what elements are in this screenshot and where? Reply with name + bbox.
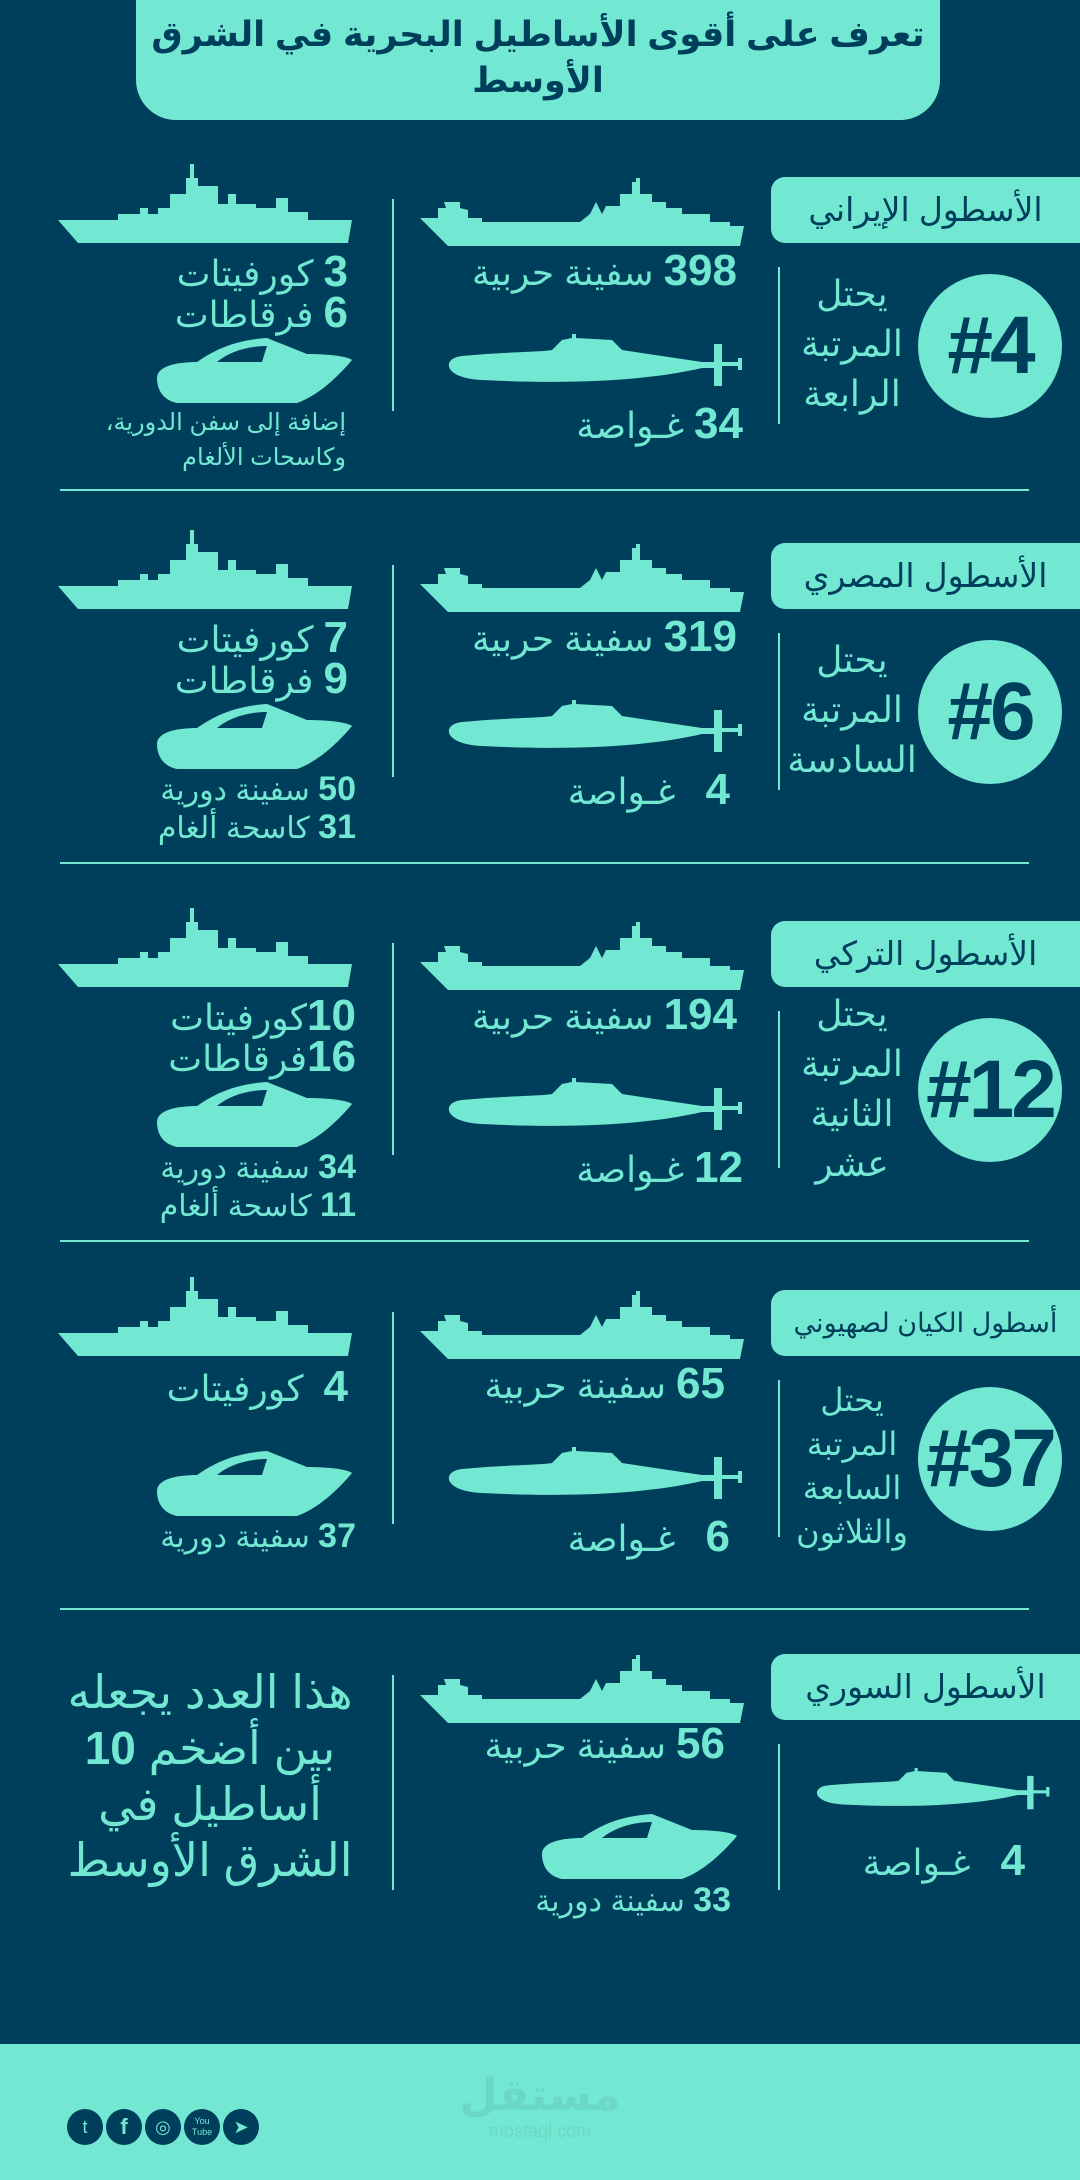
logo: mostaql.com bbox=[489, 2121, 591, 2141]
label: israel: أسطول الكيان لصهيوني bbox=[794, 1308, 1057, 1338]
icon: submarine bbox=[448, 1447, 742, 1499]
rank circle: #12 bbox=[926, 1044, 1054, 1135]
icon: submarine small bbox=[809, 1768, 1059, 1814]
note: أساطيل في bbox=[98, 1778, 322, 1830]
label: syria: الأسطول السوري bbox=[805, 1668, 1046, 1705]
title bbox=[136, 0, 940, 120]
panel: israel bbox=[58, 1277, 1080, 1561]
patrol & minesweepers: 50 سفينة دورية bbox=[160, 770, 356, 808]
icon: submarine bbox=[448, 700, 742, 752]
rank text: السادسة bbox=[787, 739, 917, 780]
warships count: 194 سفينة حربية bbox=[472, 990, 737, 1039]
rank circle: #4 bbox=[947, 300, 1033, 391]
corvettes & frigates bbox=[175, 613, 348, 703]
warships count: 65 سفينة حربية bbox=[484, 1359, 725, 1408]
icon: warship bbox=[420, 544, 744, 612]
submarines count: 12 غـواصة bbox=[576, 1143, 743, 1192]
rank text: يحتل bbox=[820, 1382, 884, 1418]
label: iran bbox=[771, 177, 1080, 243]
panel: turkey bbox=[58, 908, 1080, 1224]
corvettes & frigates: 10كورفيتات bbox=[170, 991, 356, 1040]
rank text: والثلاثون bbox=[796, 1514, 908, 1550]
icon: boat bbox=[157, 1451, 352, 1516]
rank circle bbox=[918, 1018, 1062, 1162]
rank text: يحتل bbox=[816, 639, 888, 680]
submarines count: 4 غـواصة bbox=[568, 765, 730, 814]
rank circle bbox=[918, 274, 1062, 418]
corvettes & frigates: 9 فرقاطات bbox=[175, 654, 348, 703]
patrol & minesweepers bbox=[158, 770, 356, 846]
icon: warship bbox=[420, 922, 744, 990]
rank text bbox=[787, 639, 917, 780]
patrol & minesweepers: 31 كاسحة ألغام bbox=[158, 808, 356, 846]
rank text: المرتبة bbox=[801, 323, 903, 364]
label: iran: الأسطول الإيراني bbox=[808, 191, 1043, 228]
rank circle bbox=[918, 640, 1062, 784]
icon: boat bbox=[542, 1814, 737, 1879]
submarines count: 6 غـواصة bbox=[568, 1512, 730, 1561]
note: وكاسحات الألغام bbox=[182, 444, 346, 471]
patrol & minesweepers: 34 سفينة دورية bbox=[160, 1148, 356, 1186]
patrol & minesweepers bbox=[160, 1148, 356, 1224]
patrol & minesweepers: 11 كاسحة ألغام bbox=[160, 1186, 356, 1224]
social icons: t bbox=[82, 2117, 88, 2137]
rank circle bbox=[918, 1387, 1062, 1531]
social icons bbox=[67, 2109, 261, 2145]
icon: boat bbox=[157, 704, 352, 769]
label: israel bbox=[771, 1290, 1080, 1356]
warships count: 56 سفينة حربية bbox=[484, 1719, 725, 1768]
label: syria bbox=[771, 1654, 1080, 1720]
corvettes & frigates: 3 كورفيتات bbox=[177, 247, 348, 296]
corvettes: 4 كورفيتات bbox=[167, 1362, 348, 1411]
patrol: 37 سفينة دورية bbox=[160, 1517, 356, 1555]
rank text: عشر bbox=[815, 1143, 889, 1184]
note bbox=[40, 1664, 380, 1888]
label: turkey: الأسطول التركي bbox=[814, 935, 1037, 972]
warships count: 398 سفينة حربية bbox=[472, 246, 737, 295]
icon: submarine bbox=[448, 334, 742, 386]
rank text: يحتل bbox=[816, 273, 888, 314]
icon: warship bbox=[420, 178, 744, 246]
icon: warship bbox=[420, 1291, 744, 1359]
social icons: You bbox=[194, 2116, 210, 2126]
rank text: الرابعة bbox=[803, 373, 901, 414]
panel: iran bbox=[58, 164, 1080, 471]
rank circle: #37 bbox=[926, 1413, 1054, 1504]
label: egypt bbox=[771, 543, 1080, 609]
logo: مستقل bbox=[460, 2071, 620, 2120]
title: الأوسط bbox=[472, 61, 604, 100]
rank text: السابعة bbox=[803, 1470, 901, 1506]
patrol: 33 سفينة دورية bbox=[535, 1881, 731, 1919]
warships count: 319 سفينة حربية bbox=[472, 612, 737, 661]
panel: egypt bbox=[58, 530, 1080, 846]
rank text bbox=[801, 273, 903, 415]
note: إضافة إلى سفن الدورية، bbox=[106, 409, 346, 436]
rank text: يحتل bbox=[816, 993, 888, 1034]
corvettes & frigates bbox=[168, 991, 356, 1081]
icon: submarine bbox=[448, 1078, 742, 1130]
panel: syria bbox=[0, 1654, 1080, 1974]
rank text: المرتبة bbox=[807, 1426, 897, 1462]
icon: frigate bbox=[58, 530, 352, 609]
rank text bbox=[796, 1382, 908, 1551]
note: هذا العدد يجعله bbox=[68, 1666, 352, 1718]
logo bbox=[440, 2072, 640, 2142]
social icons: f bbox=[120, 2114, 128, 2139]
note: بين أضخم 10 bbox=[85, 1722, 335, 1774]
icon: boat bbox=[157, 1082, 352, 1147]
corvettes & frigates bbox=[175, 247, 348, 337]
footer bbox=[0, 2044, 1080, 2180]
rank text: المرتبة bbox=[801, 1043, 903, 1084]
corvettes & frigates: 16فرقاطات bbox=[168, 1032, 356, 1081]
label: egypt: الأسطول المصري bbox=[804, 557, 1047, 594]
title: تعرف على أقوى الأساطيل البحرية في الشرق bbox=[151, 15, 925, 54]
rank circle: #6 bbox=[947, 666, 1033, 757]
social icons: ◎ bbox=[155, 2117, 171, 2137]
icon: frigate bbox=[58, 908, 352, 987]
label: turkey bbox=[771, 921, 1080, 987]
submarines count: 34 غـواصة bbox=[576, 399, 743, 448]
rank text: المرتبة bbox=[801, 689, 903, 730]
icon: frigate bbox=[58, 164, 352, 243]
social icons: Tube bbox=[192, 2127, 212, 2137]
social icons: ➤ bbox=[233, 2117, 249, 2137]
icon: warship bbox=[420, 1655, 744, 1723]
rank text bbox=[801, 993, 903, 1185]
note bbox=[106, 409, 346, 471]
corvettes & frigates: 6 فرقاطات bbox=[175, 288, 348, 337]
icon: frigate bbox=[58, 1277, 352, 1356]
rank text: الثانية bbox=[810, 1093, 894, 1134]
note: الشرق الأوسط bbox=[67, 1834, 353, 1886]
icon: boat bbox=[157, 338, 352, 403]
corvettes & frigates: 7 كورفيتات bbox=[177, 613, 348, 662]
submarines count: 4 غـواصة bbox=[863, 1836, 1025, 1885]
